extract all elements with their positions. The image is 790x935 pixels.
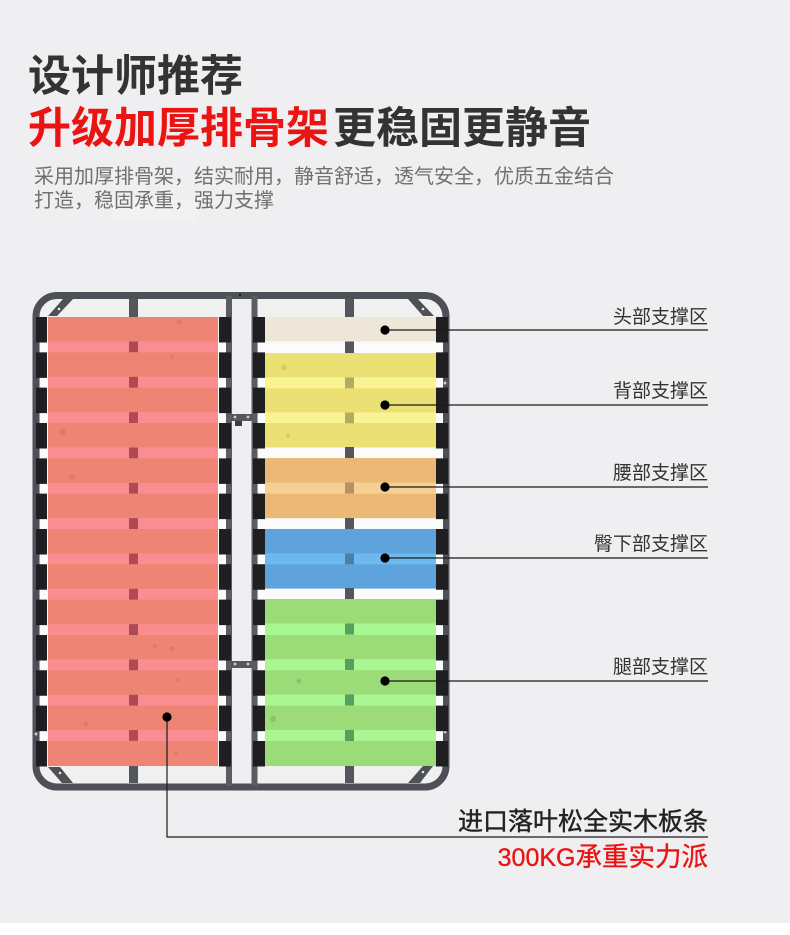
callout: leg support zone: [380, 656, 708, 686]
slat zone: hip: [265, 529, 436, 599]
callout: leg support zone: 腿部支撑区: [613, 656, 708, 678]
corner brackets: [48, 299, 434, 783]
heading: upgraded slat frame: 升级加厚排骨架: [28, 105, 329, 153]
white gaps between clips: [40, 341, 443, 741]
callout: back support zone: [380, 380, 708, 410]
slat zone: head: [265, 317, 436, 353]
callout: larch solid wood slats: 进口落叶松全实木板条: [458, 808, 708, 836]
callout: larch solid wood slats: 300KG承重实力派: [498, 842, 708, 872]
text block: description: 打造，稳固承重，强力支撑: [34, 189, 274, 212]
slats: full-length red panel: [48, 317, 218, 766]
heading: upgraded slat frame: [28, 105, 591, 153]
callout: waist support zone: 腰部支撑区: [613, 462, 708, 484]
callout: back support zone: 背部支撑区: [613, 380, 708, 402]
slat zone: back: [265, 353, 436, 458]
callout: head support zone: [380, 306, 708, 335]
title: designer recommended: 设计师推荐: [28, 53, 243, 101]
metal frame: [34, 294, 446, 787]
callout: head support zone: 头部支撑区: [613, 306, 708, 328]
slat zone: legs: [265, 599, 436, 766]
slat zone: waist: [265, 458, 436, 529]
callout: larch solid wood slats: [162, 712, 708, 872]
text block: description: 采用加厚排骨架，结实耐用，静音舒适，透气安全，优质五金结合: [34, 165, 614, 188]
black slat clips: [36, 317, 448, 766]
bed frame diagram: [34, 294, 448, 787]
text block: description: [34, 165, 614, 212]
callout: under-hip support zone: 臀下部支撑区: [594, 533, 708, 555]
callout: under-hip support zone: [380, 533, 708, 563]
heading: upgraded slat frame: 更稳固更静音: [333, 105, 591, 153]
callout: waist support zone: [380, 462, 708, 492]
